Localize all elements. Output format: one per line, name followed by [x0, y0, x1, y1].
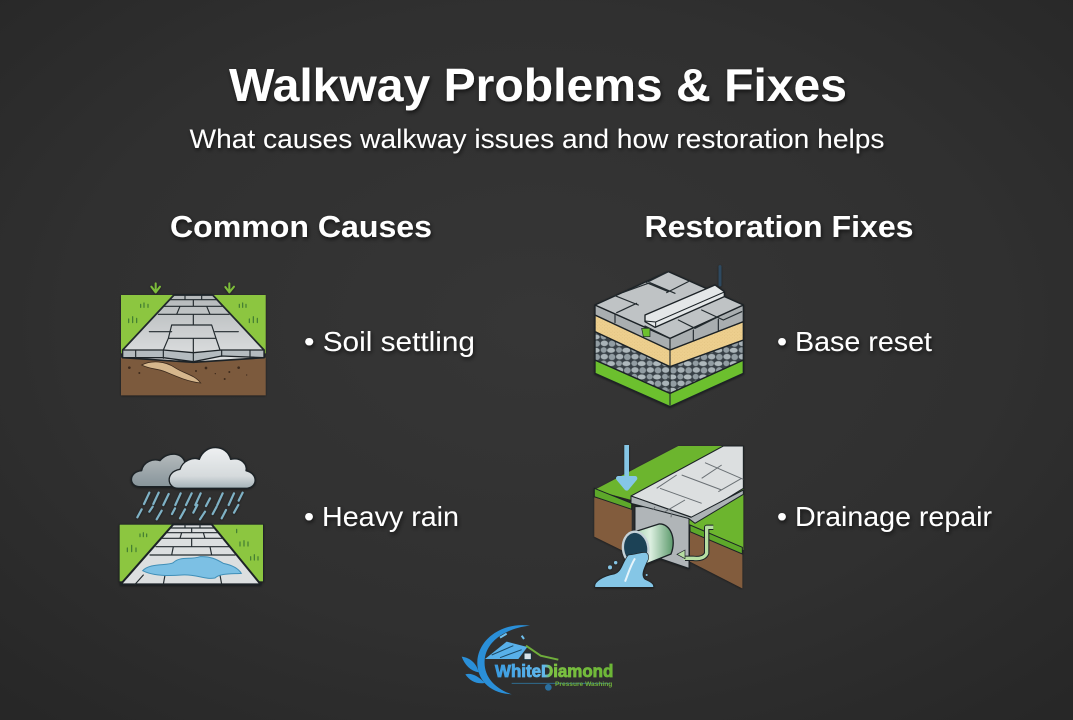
logo: White Diamond Pressure Washing	[462, 625, 613, 694]
icon: heavy rain	[119, 448, 263, 584]
heading: restoration fixes: Restoration Fixes	[644, 209, 914, 244]
text: base reset: • Base reset	[777, 326, 932, 357]
text: drainage repair: • Drainage repair	[777, 501, 992, 532]
icon: soil settling	[121, 283, 266, 395]
text: soil settling: • Soil settling	[304, 326, 475, 357]
icon: base reset	[595, 267, 743, 407]
logo tagline: Pressure Washing	[555, 681, 612, 688]
subtitle: What causes walkway issues and how restoration helps	[190, 124, 884, 154]
text: heavy rain: • Heavy rain	[304, 501, 459, 532]
icon: drainage repair	[594, 445, 743, 588]
title: Walkway Problems & Fixes	[229, 59, 847, 111]
logo wordmark: WhiteDiamond	[495, 661, 613, 681]
heading: common causes: Common Causes	[170, 209, 432, 244]
logo emblem	[462, 625, 610, 694]
